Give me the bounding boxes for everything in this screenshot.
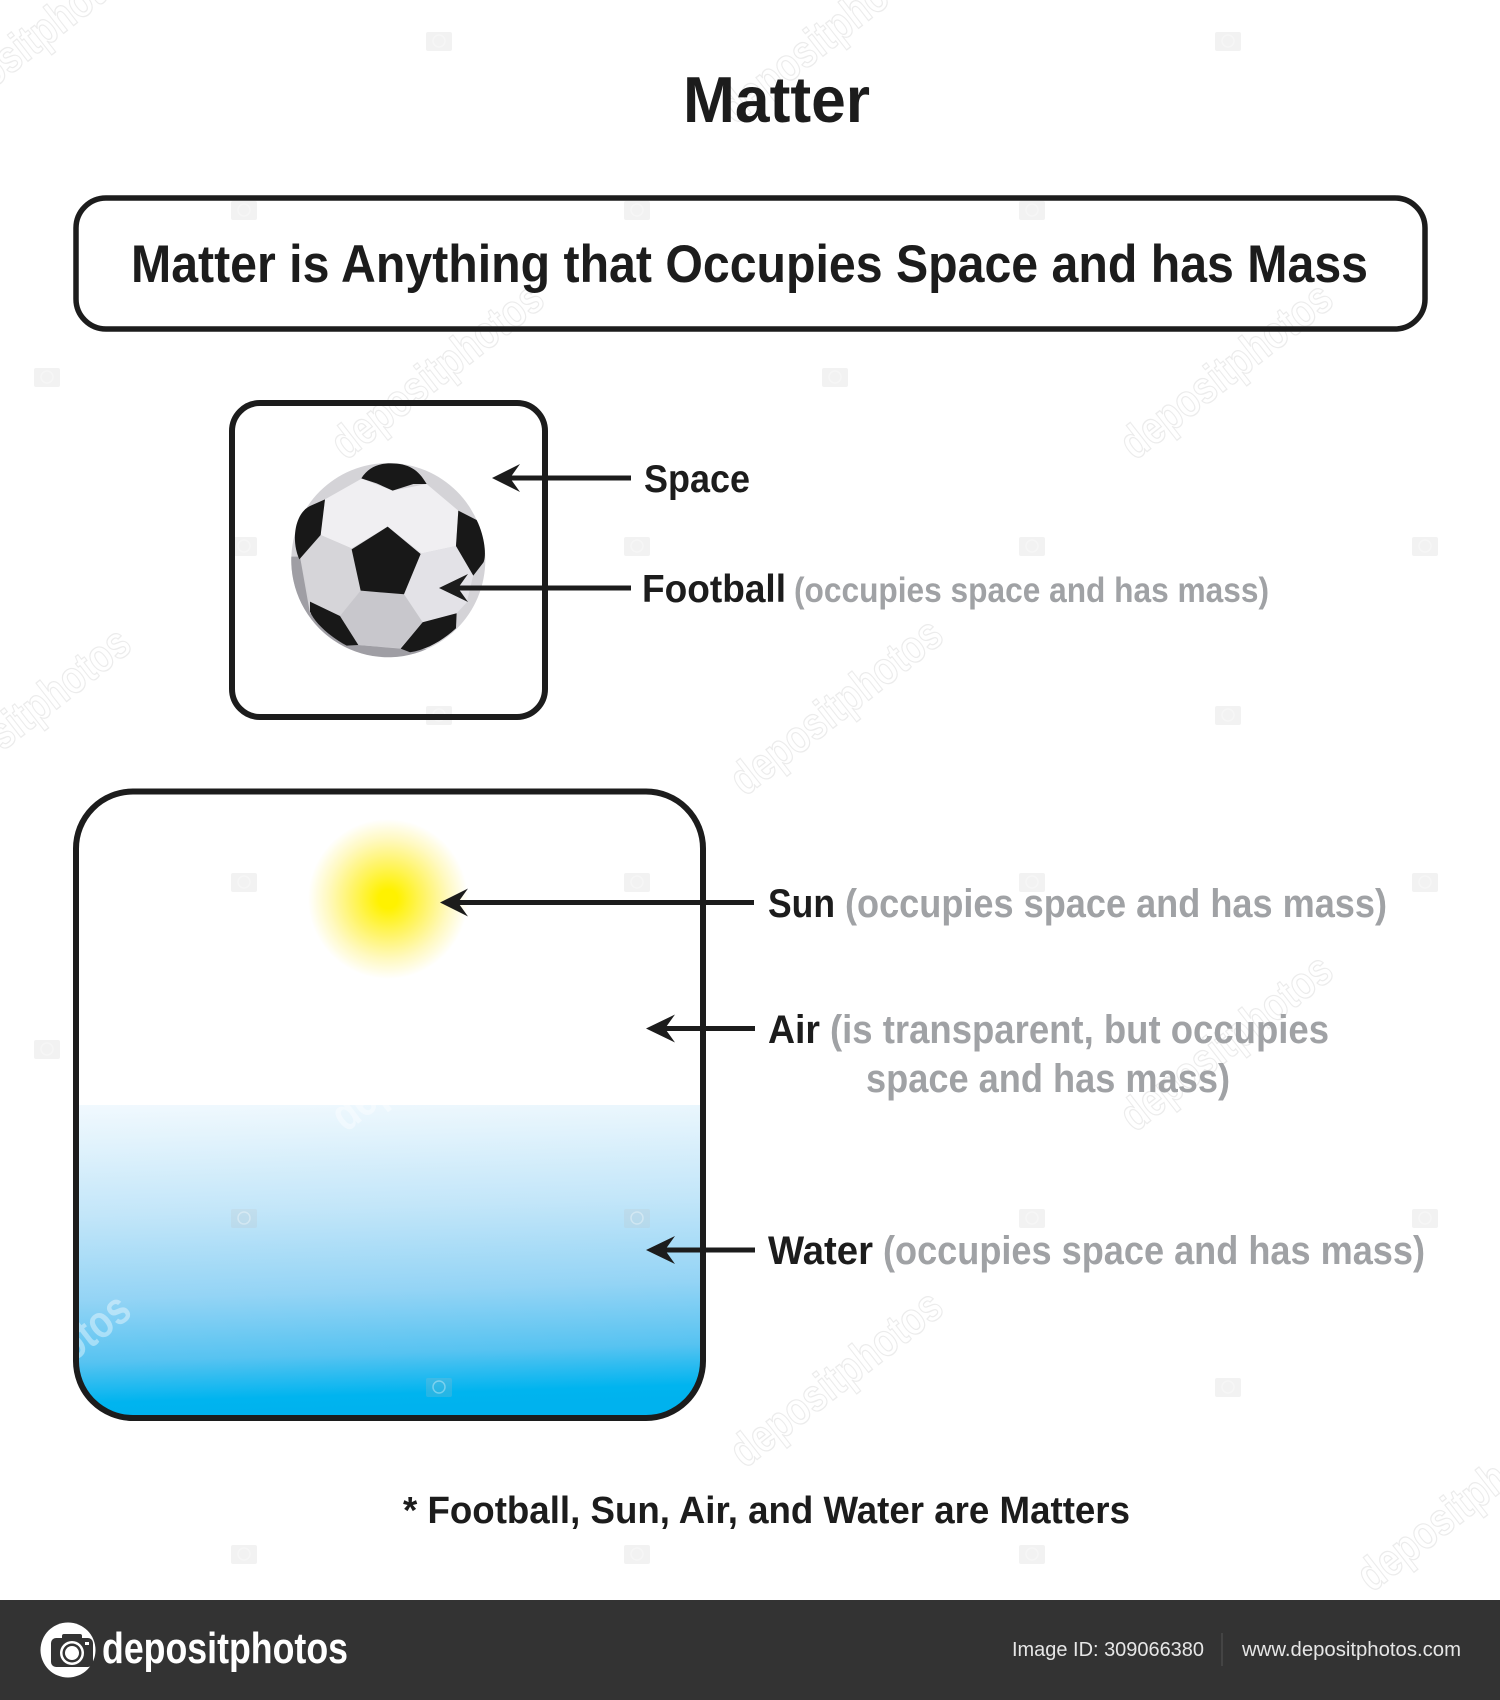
water <box>76 1105 703 1418</box>
label: sun: Sun <box>768 882 835 926</box>
label: football <box>642 568 1269 611</box>
arrow: football <box>439 574 631 602</box>
watermark on water: depositphotos <box>320 943 553 1141</box>
panel: football in space <box>232 403 545 717</box>
definition text: Matter is Anything that Occupies Space and has Mass <box>131 235 1368 294</box>
label: football: Football <box>642 568 786 611</box>
watermark pattern: depositphotos <box>320 271 553 469</box>
footer bar <box>0 1600 1500 1700</box>
icon: camera logo <box>40 1622 96 1678</box>
label: football: (occupies space and has mass) <box>794 571 1269 610</box>
label: space: Space <box>644 458 750 501</box>
watermark on water <box>0 943 553 1480</box>
arrow: sun <box>440 888 754 916</box>
label: air <box>768 1008 1329 1101</box>
footnote: * Football, Sun, Air, and Water are Matters <box>403 1490 1130 1532</box>
label: air: space and has mass) <box>866 1057 1230 1101</box>
panel: sun, air and water <box>0 792 703 1480</box>
arrow: water <box>646 1236 755 1264</box>
label: air: (is transparent, but occupies <box>830 1008 1329 1052</box>
logo wordmark: depositphotos <box>102 1624 348 1673</box>
definition box <box>76 198 1425 329</box>
arrow: air <box>646 1014 755 1042</box>
icon: sun <box>308 819 468 979</box>
label: water: (occupies space and has mass) <box>883 1229 1425 1273</box>
label: water: Water <box>768 1229 873 1273</box>
icon: football <box>291 463 485 657</box>
watermark pattern: depositphotos <box>719 1279 952 1477</box>
label: sun: (occupies space and has mass) <box>845 882 1387 926</box>
watermark pattern: depositphotos <box>1109 943 1342 1141</box>
website: www.depositphotos.com <box>1241 1639 1461 1661</box>
watermark pattern: depositphotos <box>719 607 952 805</box>
arrow: space <box>492 464 631 492</box>
label: air: Air <box>768 1008 820 1052</box>
image id: Image ID: 309066380 <box>1012 1639 1204 1661</box>
title: Matter <box>683 63 870 136</box>
watermark pattern: depositphotos <box>1109 271 1342 469</box>
